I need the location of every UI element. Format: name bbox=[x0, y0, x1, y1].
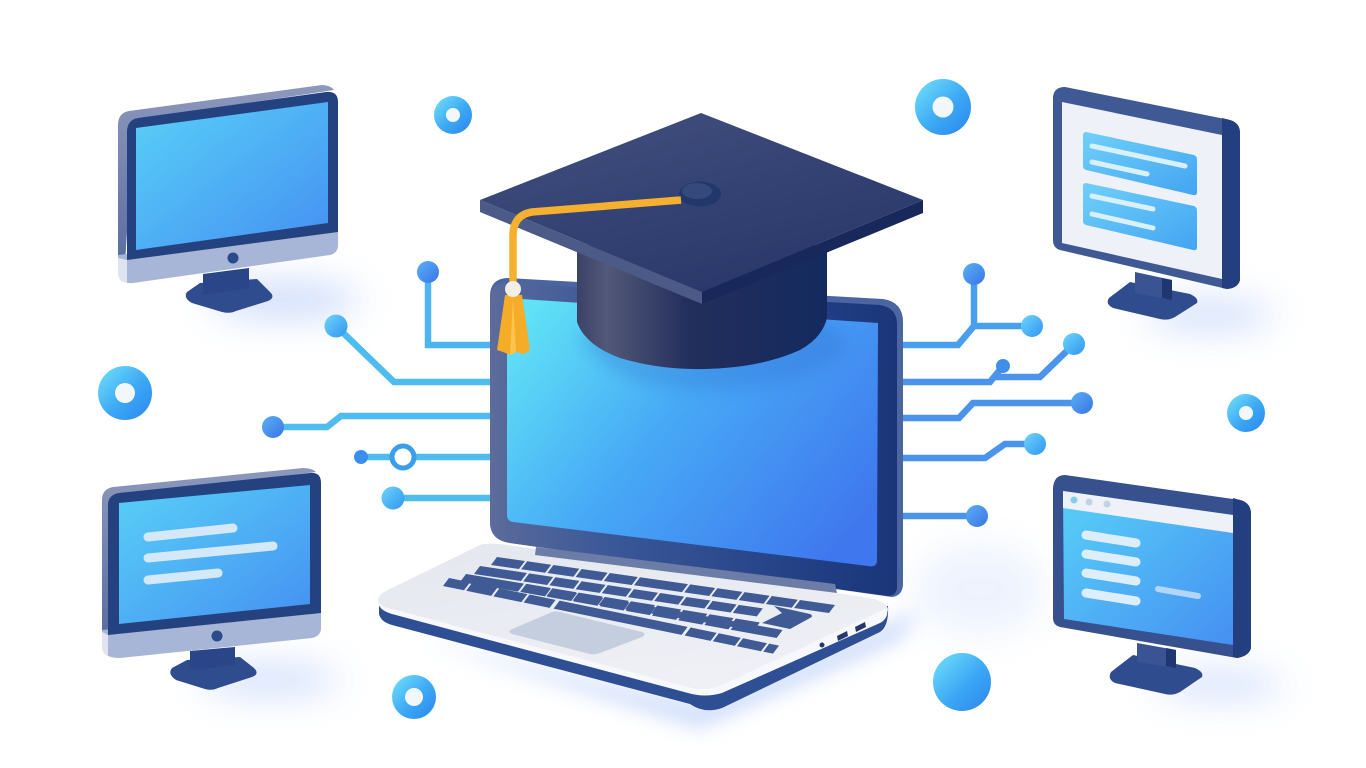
touchpad bbox=[509, 612, 644, 654]
orb top right bbox=[915, 79, 971, 135]
body side bbox=[102, 468, 316, 637]
laptop screen bbox=[507, 298, 878, 566]
nodes bbox=[262, 261, 439, 510]
board edge left bbox=[480, 200, 702, 304]
panel 2 bbox=[1083, 183, 1197, 250]
orb right bbox=[1227, 394, 1265, 432]
stand bbox=[170, 657, 257, 690]
circuit lines: left bbox=[262, 261, 492, 510]
home button bbox=[212, 630, 222, 642]
screen bbox=[1063, 491, 1233, 645]
screen bbox=[1062, 102, 1222, 279]
monitor: top right bbox=[1053, 87, 1240, 320]
browser bar bbox=[1063, 491, 1233, 533]
shadow on screen bbox=[577, 320, 850, 390]
floating orbs bbox=[98, 79, 1265, 719]
screen bbox=[136, 102, 328, 250]
keyboard bbox=[446, 561, 832, 650]
monitor: bottom right bbox=[1053, 475, 1251, 695]
laptop bbox=[378, 278, 903, 710]
stand bbox=[186, 279, 272, 313]
monitor: bottom left bbox=[102, 468, 321, 690]
board top bbox=[480, 113, 923, 292]
lid frame bbox=[490, 283, 897, 596]
stand bbox=[1108, 282, 1197, 320]
monitor: top left bbox=[118, 85, 338, 313]
stand bbox=[1110, 655, 1202, 695]
body bbox=[1053, 87, 1240, 289]
frame bbox=[108, 473, 321, 635]
base highlight bbox=[378, 601, 887, 696]
orb top left bbox=[434, 96, 472, 134]
text lines bbox=[148, 528, 273, 580]
board edge right bbox=[702, 200, 923, 304]
circuit lines: right bbox=[900, 263, 1093, 527]
cord bbox=[513, 200, 681, 284]
orb left bbox=[98, 366, 152, 420]
body side bbox=[118, 85, 334, 264]
ports bbox=[820, 622, 866, 648]
base top bbox=[378, 544, 888, 691]
cap body bbox=[577, 245, 827, 369]
panel 1 bbox=[1083, 132, 1197, 195]
body bbox=[1053, 475, 1251, 658]
orb bottom left bbox=[392, 675, 436, 719]
browser dots bbox=[1070, 496, 1110, 508]
tassel bbox=[497, 295, 530, 355]
home button bbox=[228, 252, 238, 264]
lid side strip bbox=[490, 278, 903, 597]
text lines bbox=[1086, 535, 1198, 601]
button bbox=[679, 182, 721, 206]
graduation cap bbox=[480, 113, 923, 390]
chin bbox=[118, 230, 338, 283]
orb bottom right bbox=[933, 653, 991, 711]
chin bbox=[102, 610, 321, 658]
knot bbox=[505, 281, 521, 297]
screen bbox=[119, 485, 310, 624]
nodes bbox=[963, 263, 1093, 527]
base underside bbox=[379, 604, 888, 710]
hinge bbox=[535, 547, 837, 593]
soft shadows bbox=[200, 282, 1285, 728]
enter key bbox=[762, 606, 812, 629]
panel lines bbox=[1092, 146, 1185, 228]
frame bbox=[127, 92, 338, 260]
